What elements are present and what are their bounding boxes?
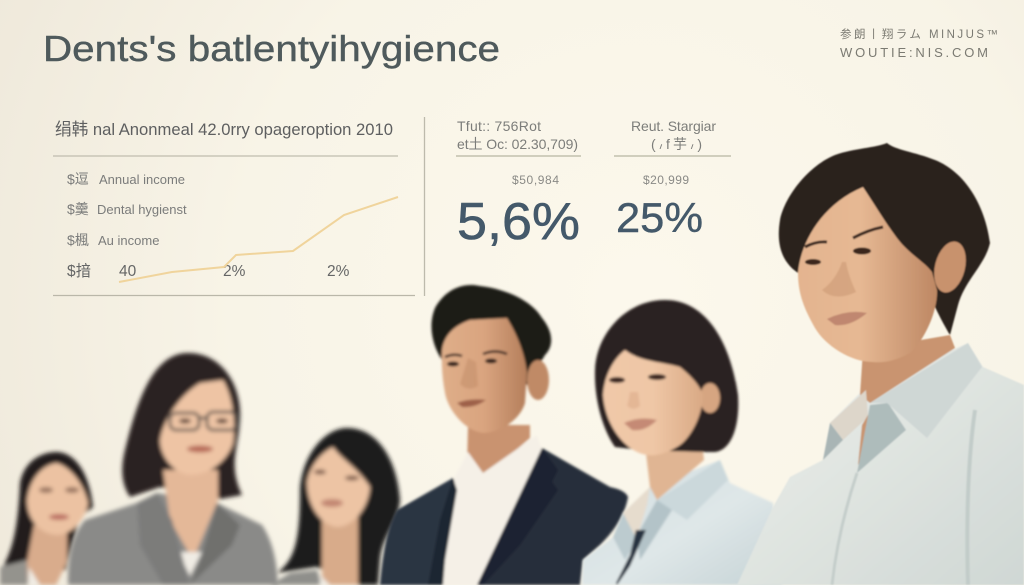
- panel: statistic 5,6%: 5,6%: [457, 193, 580, 251]
- line chart: [119, 197, 398, 282]
- panel: statistic 5,6%: $50,984: [512, 173, 559, 187]
- panel: annual income chart: [53, 120, 415, 296]
- title: Dents's batlentyihygience: [43, 28, 500, 69]
- income row labels: Dental hygienst: [97, 202, 187, 217]
- person: long-haired woman: [270, 428, 400, 585]
- panel: statistic 25%: Reut. Stargiar: [631, 118, 716, 134]
- income row labels: Au income: [98, 233, 159, 248]
- income row labels: $楓: [67, 232, 89, 248]
- panel: statistic 5,6%: et土 Oc: 02.30,709): [457, 136, 578, 152]
- person: short-haired woman: [582, 300, 782, 585]
- panel: statistic 25%: (៸f芋៸): [651, 136, 702, 152]
- person: man in dark suit: [380, 285, 628, 585]
- panel: statistic 5,6%: Tfut:: 756Rot: [457, 118, 541, 134]
- income row labels: [67, 171, 187, 248]
- logo text: [840, 27, 998, 60]
- income row labels: $逗: [67, 171, 89, 187]
- logo text: WOUTIE:NIS.COM: [840, 45, 988, 60]
- axis values: 40: [119, 263, 137, 280]
- panel: statistic 25%: 25%: [616, 194, 703, 241]
- person: woman with glasses: [68, 353, 278, 585]
- person: large man on right: [737, 143, 1024, 585]
- axis values: 2%: [327, 263, 350, 280]
- panel divider: [424, 117, 426, 296]
- income row labels: Annual income: [99, 172, 185, 187]
- panel: statistic 25%: $20,999: [643, 173, 689, 187]
- income row labels: $羹: [67, 201, 89, 217]
- axis values: $揞: [67, 262, 91, 280]
- panel: statistic 5,6%: [456, 118, 581, 251]
- axis values: [67, 262, 350, 280]
- axis values: 2%: [223, 263, 246, 280]
- person: far-left woman: [0, 452, 93, 585]
- panel: statistic 25%: [614, 118, 731, 241]
- logo text: 参朗丨翔ラム MINJUS™: [840, 27, 998, 41]
- chart heading: 绢韩 nal Anonmeal 42.0rry opageroption 2010: [55, 120, 393, 139]
